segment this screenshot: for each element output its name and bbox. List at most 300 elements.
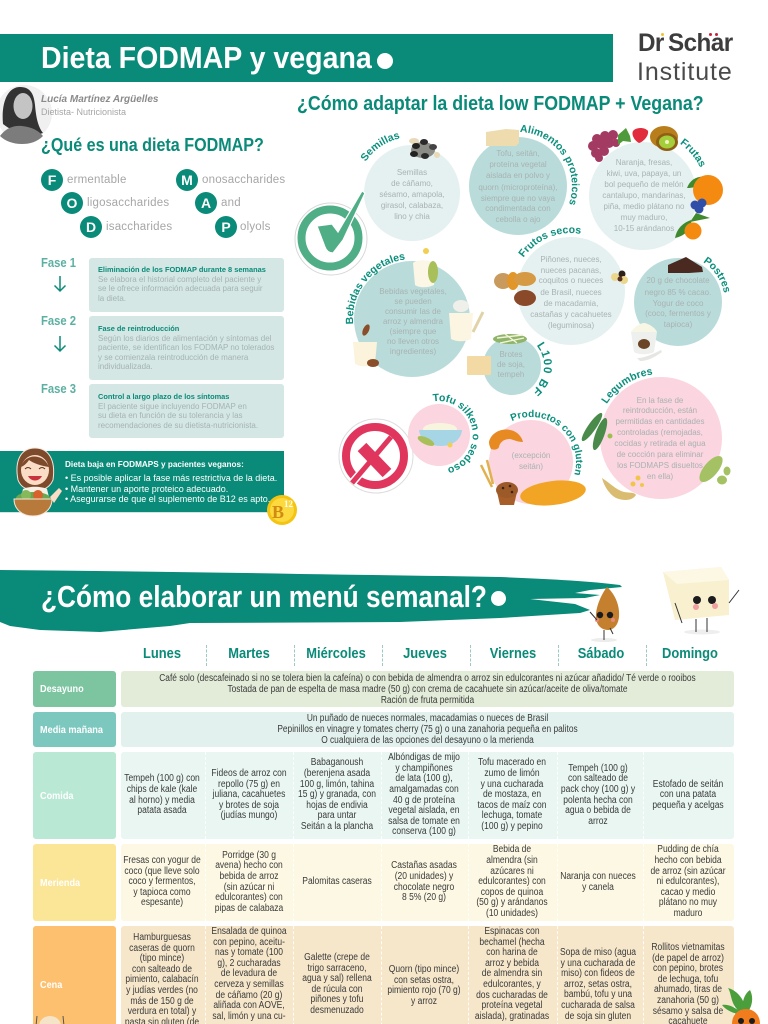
row: comida: arroz bbox=[588, 816, 608, 827]
row: merienda: espesante) bbox=[141, 897, 183, 908]
row: cena: y arroz bbox=[411, 996, 437, 1007]
row: cena: g), 2 cucharadas bbox=[217, 958, 281, 969]
row: merienda: edulcorantes) con bbox=[478, 876, 546, 887]
panel: frutas: Frutas bbox=[680, 138, 704, 167]
FODMAP acronym list: M bbox=[181, 172, 193, 188]
heading: how to adapt: ¿Cómo adaptar la dieta low FODMAP + Vegana? bbox=[297, 93, 704, 115]
panel: frutos secos: coquitos o nueces bbox=[539, 276, 603, 285]
icon: red cross badge bbox=[339, 419, 413, 493]
icon: B12 coin: 12 bbox=[284, 499, 294, 509]
panel: bebidas vegetales bbox=[346, 248, 484, 377]
row: cena: desmenuzado bbox=[310, 1005, 364, 1016]
callout text bbox=[65, 460, 277, 504]
panel: frutas: cantalupo, mandarinas, bbox=[602, 191, 686, 200]
phase 2 label: Fase 2 bbox=[41, 314, 76, 328]
panel: bebidas vegetales: se pueden bbox=[394, 297, 432, 306]
row: comida: tacos de maíz con bbox=[478, 800, 546, 811]
diagram: adapted foods bbox=[294, 125, 730, 506]
panel: legumbres: en ella) bbox=[647, 472, 673, 481]
row: comida: con salteado de bbox=[568, 773, 628, 784]
callout: vegan patients bbox=[0, 451, 284, 513]
panel: alimentos proteicos: aislada en polvo y bbox=[486, 171, 550, 180]
phase 1 box: se le ofrece información adecuada para seguir bbox=[98, 284, 263, 293]
row: cena: zanahoria (50 g) bbox=[657, 995, 719, 1006]
FODMAP acronym list: ligosaccharides bbox=[87, 197, 169, 209]
row: media mañana: O cualquiera de las opciones del desayuno o la merienda bbox=[321, 735, 534, 746]
row: merienda: coco y fermentos, bbox=[128, 876, 196, 887]
author name bbox=[41, 94, 158, 117]
row: cena: miso) con fideos de bbox=[561, 968, 635, 979]
table header: days of the week: Sábado bbox=[578, 645, 624, 662]
row: cena: bambú, tofu y una bbox=[564, 989, 632, 1000]
row: desayuno: Tostada de pan de espelta de masa madre (50 g) con crema de cacahuete sin azúcar/aceite de oliva/tomate bbox=[227, 684, 628, 695]
icon: soy drink bbox=[413, 248, 438, 287]
panel: frutos secos: de macadamia, bbox=[544, 299, 598, 308]
icon: coconut yogurt bbox=[631, 323, 662, 361]
callout text: • Mantener un aporte proteico adecuado. bbox=[65, 484, 228, 494]
row: comida: 40 g de proteína bbox=[393, 794, 455, 806]
table header: days of the week bbox=[143, 645, 718, 666]
row: comida bbox=[121, 752, 734, 839]
row: comida: vegetal aislada, en bbox=[389, 805, 459, 816]
row: merienda: (50 g) y arándanos bbox=[476, 897, 548, 908]
row: cena: con harina de bbox=[486, 947, 538, 958]
icon: tofu block bbox=[486, 129, 519, 146]
FODMAP acronym list: O bbox=[67, 195, 77, 211]
panel: legumbres: Legumbres bbox=[601, 369, 652, 404]
label: cena: Cena bbox=[40, 979, 62, 991]
row: comida: patata asada bbox=[137, 805, 187, 816]
panel: brotes y tempeh: de soja, bbox=[497, 360, 525, 369]
row: cena: arroz y bebida bbox=[485, 958, 539, 969]
row: merienda: (20 unidades) y bbox=[395, 871, 453, 882]
row: cena: trigo sarraceno, bbox=[307, 963, 367, 974]
row: comida: Tempeh (100 g) con bbox=[124, 773, 200, 784]
row: cena: de almendra sin bbox=[482, 968, 542, 979]
label: comida: Comida bbox=[40, 790, 74, 802]
row: comida: para untar bbox=[318, 810, 356, 821]
icon: mandarin bbox=[675, 213, 710, 240]
icon: soybeans bbox=[602, 476, 644, 500]
label: desayuno: Desayuno bbox=[40, 683, 84, 695]
arrow: phase 2 to 3 bbox=[54, 336, 66, 352]
panel: postres: Yogur de coco bbox=[653, 299, 704, 308]
row: merienda: plátano no muy bbox=[659, 897, 717, 908]
phase 3 box: su dieta en función de su tolerancia y las bbox=[98, 411, 243, 420]
icon: kiwi bbox=[650, 126, 678, 151]
FODMAP acronym list: onosaccharides bbox=[202, 174, 285, 186]
row: merienda: edulcorantes) con bbox=[215, 892, 283, 903]
row: merienda bbox=[121, 844, 734, 921]
row: cena: ahumado, tiras de bbox=[654, 984, 722, 995]
row: cena: Galette (crepe de bbox=[304, 952, 370, 963]
phase 2 box: paciente, se identifican los FODMAP no tolerados bbox=[98, 343, 274, 352]
panel: postres: tapioca) bbox=[664, 320, 693, 329]
row: comida: chips de kale (kale bbox=[127, 784, 197, 795]
row: merienda: (sin azúcar ni bbox=[224, 882, 274, 892]
row: cena: (tipo mince) bbox=[140, 953, 184, 964]
row: cena: Rollitos vietnamitas bbox=[651, 942, 725, 953]
FODMAP acronym list: and bbox=[221, 197, 241, 209]
phase 1 box bbox=[89, 258, 284, 312]
panel: postres bbox=[631, 256, 730, 361]
row: desayuno: Ración de fruta permitida bbox=[381, 695, 474, 706]
row: merienda: (10 unidades) bbox=[486, 908, 538, 919]
panel: frutos secos: (leguminosa) bbox=[548, 321, 594, 330]
panel: bebidas vegetales: (siempre que bbox=[390, 327, 437, 336]
label: desayuno bbox=[33, 671, 116, 707]
panel: brotes y tempeh: tempeh bbox=[498, 370, 524, 379]
row: cena: nas y tomate (100 bbox=[215, 947, 283, 958]
panel: tofu silken bbox=[408, 394, 478, 473]
phase 2 box: individualizada. bbox=[98, 362, 153, 371]
panel: postres: 20 g de chocolate bbox=[646, 276, 710, 285]
row: comida: lechuga, tomate bbox=[482, 810, 542, 821]
panel: frutas: piña, medio plátano no bbox=[604, 202, 685, 211]
row: cena bbox=[121, 926, 734, 1024]
phase 3 box bbox=[89, 384, 284, 438]
icon: muffin bbox=[496, 482, 518, 505]
panel: productos con gluten: Productos con gluten bbox=[510, 410, 583, 475]
header band bbox=[0, 34, 613, 82]
row: comida: pack choy (100 g) y bbox=[561, 784, 635, 795]
row: merienda: Pudding de chía bbox=[657, 844, 719, 855]
table header: days of the week: Lunes bbox=[143, 645, 181, 662]
FODMAP acronym list: A bbox=[201, 195, 211, 211]
icon: edamame bbox=[695, 452, 730, 486]
panel: legumbres: En la fase de bbox=[637, 396, 684, 405]
row: merienda: cacao y medio bbox=[661, 887, 715, 898]
panel: frutos secos bbox=[494, 227, 628, 345]
panel: bebidas vegetales: Bebidas vegetales, bbox=[379, 287, 447, 296]
panel: alimentos proteicos: condimentada con bbox=[485, 204, 551, 213]
phase 1 box: Se elabora el historial completo del paciente y bbox=[98, 275, 261, 284]
row: cena: Sopa de miso (agua bbox=[560, 947, 636, 958]
panel: productos con gluten: (excepción bbox=[512, 451, 550, 460]
icon: almond mascot bbox=[590, 587, 620, 642]
author name: Lucía Martínez Argüelles bbox=[41, 94, 158, 105]
row: merienda: hecho con bebida bbox=[654, 855, 722, 866]
row: comida: (berenjena asada bbox=[304, 768, 370, 779]
row: merienda: avena) hecho con bbox=[215, 860, 283, 871]
panel: semillas: de cáñamo, bbox=[391, 179, 433, 188]
title dot bbox=[377, 53, 393, 69]
row: comida: de mostaza, en bbox=[483, 789, 541, 800]
row: media mañana: Un puñado de nueces normales, macadamias o nueces de Brasil bbox=[307, 713, 548, 724]
icon: woman with vegetable bowl bbox=[14, 448, 62, 516]
panel: postres: negro 85 % cacao. bbox=[645, 288, 711, 297]
row: merienda: y tapioca como bbox=[133, 887, 191, 898]
row: merienda: almendra (sin bbox=[486, 855, 538, 866]
row: merienda: ni edulcorantes), bbox=[657, 876, 719, 887]
table header: days of the week: Miércoles bbox=[306, 645, 366, 662]
logo: Dr Schär Institute bbox=[637, 29, 733, 86]
row: cena: y una cucharada de bbox=[561, 958, 635, 969]
panel: frutos secos: Frutos secos bbox=[518, 227, 581, 258]
panel: bebidas vegetales: Bebidas vegetales bbox=[346, 254, 405, 324]
panel: brotes y tempeh bbox=[467, 334, 552, 396]
row: comida: Tofu macerado en bbox=[478, 757, 546, 768]
phase 2 box: Según los diarios de alimentación y síntomas del bbox=[98, 334, 271, 343]
row: comida: y champiñones bbox=[395, 763, 453, 774]
phase 2 box bbox=[89, 316, 284, 380]
panel: postres: (coco, fermentos y bbox=[645, 309, 711, 318]
heading: what is FODMAP: ¿Qué es una dieta FODMAP? bbox=[41, 135, 264, 155]
row: cena: Espinacas con bbox=[484, 926, 540, 937]
panel: legumbres: permitidas en cantidades bbox=[616, 417, 704, 426]
panel: frutas: muy maduro, bbox=[621, 213, 667, 222]
row: desayuno bbox=[121, 671, 734, 707]
row: comida: agua o bebida de bbox=[565, 805, 631, 816]
row: cena: y judías verdes (no bbox=[126, 985, 198, 996]
phase 3 box: Control a largo plazo de los síntomas bbox=[98, 392, 229, 401]
row: comida: (judías mungo) bbox=[221, 810, 277, 821]
icon: almond drink bbox=[353, 323, 379, 367]
table header: days of the week: Domingo bbox=[662, 645, 718, 662]
icon: bean sprouts bbox=[493, 334, 527, 344]
icon: small nuts bbox=[611, 270, 628, 284]
row: comida: Fideos de arroz con bbox=[211, 768, 287, 779]
icon: rice drink bbox=[449, 300, 483, 341]
FODMAP acronym list: olyols bbox=[240, 221, 271, 233]
heading: weekly menu: ¿Cómo elaborar un menú semanal? bbox=[41, 579, 487, 614]
row: media mañana: Pepinillos en vinagre y tomates cherry (75 g) o una zanahoria pequeña en palitos bbox=[277, 724, 578, 735]
icon: seeds bbox=[409, 138, 440, 159]
icon: chocolate bbox=[668, 257, 703, 273]
panel: semillas: lino y chia bbox=[394, 212, 430, 221]
table header: days of the week: Viernes bbox=[490, 645, 536, 662]
panel: bebidas vegetales: no lleven otros bbox=[387, 337, 439, 346]
panel: frutas: Naranja, fresas, bbox=[616, 158, 672, 167]
row: cena: bechamel (hecha bbox=[479, 937, 545, 948]
FODMAP acronym list: isaccharides bbox=[106, 221, 172, 233]
panel: legumbres: reintroducción, están bbox=[623, 406, 697, 415]
row: comida: amalgamadas con bbox=[389, 784, 459, 795]
row: comida: pequeña y acelgas bbox=[652, 800, 724, 811]
logo: Dr Schär Institute: Institute bbox=[637, 58, 733, 86]
row: cena: aislada), gratinadas bbox=[475, 1011, 549, 1022]
panel: productos con gluten bbox=[480, 410, 586, 506]
panel: semillas: Semillas bbox=[397, 168, 427, 177]
panel: frutos secos: de Brasil, nueces bbox=[540, 288, 602, 297]
row: cena: piñones y tofu bbox=[311, 994, 363, 1005]
FODMAP acronym list bbox=[41, 169, 285, 238]
panel: brotes y tempeh: Brotes bbox=[499, 350, 523, 359]
row: merienda: y canela bbox=[582, 882, 614, 892]
row: cena: con setas ostra, bbox=[394, 975, 454, 986]
callout text: • Asegurarse de que el suplemento de B12 es apto. bbox=[65, 494, 270, 504]
panel: alimentos proteicos: Tofu, seitán, bbox=[496, 149, 540, 158]
label: merienda bbox=[33, 844, 116, 921]
row: cena: más de 150 g de bbox=[130, 996, 194, 1007]
row: cena: sal, limón y una cu- bbox=[212, 1011, 286, 1022]
label: comida bbox=[33, 752, 116, 839]
panel: bebidas vegetales: consumir las de bbox=[385, 307, 442, 316]
arrow: phase 1 to 2 bbox=[54, 276, 66, 292]
row: cena: de lechuga, tofu bbox=[658, 974, 718, 985]
FODMAP acronym list: D bbox=[86, 219, 96, 235]
panel: frutos secos: nueces pacanas, bbox=[541, 266, 601, 275]
row: comida: Seitán a la plancha bbox=[301, 821, 373, 832]
row: comida: de lata (100 g), bbox=[395, 773, 453, 784]
banner: brush stroke bbox=[0, 570, 622, 632]
row: cena: con pepino, brotes bbox=[653, 963, 723, 974]
phase 1 box: la dieta. bbox=[98, 294, 126, 303]
row: cena: (de papel de arroz) bbox=[652, 953, 724, 964]
phase 3 box: recomendaciones de su dietista-nutricionista. bbox=[98, 421, 258, 430]
row: cena: Hamburguesas bbox=[133, 932, 191, 943]
table header: days of the week: Jueves bbox=[403, 645, 447, 662]
row: cena: de levadura de bbox=[221, 968, 277, 979]
label: cena bbox=[33, 926, 116, 1024]
icon: strawberry bbox=[632, 128, 648, 143]
row: comida: y una cucharada bbox=[481, 779, 543, 790]
row: merienda: Castañas asadas bbox=[391, 860, 457, 871]
panel: tofu silken: Tofu silken o sedoso bbox=[432, 394, 478, 473]
row: cena: con salteado de bbox=[132, 964, 192, 975]
icon: blueberries bbox=[690, 198, 706, 214]
row: cena: Quorn (tipo mince) bbox=[389, 964, 459, 975]
row: comida: con una patata bbox=[660, 789, 716, 800]
FODMAP acronym list: P bbox=[221, 219, 231, 235]
panel: frutos secos: Piñones, nueces, bbox=[540, 255, 602, 264]
row: merienda: Porridge (30 g bbox=[222, 850, 276, 861]
panel: alimentos proteicos: quorn (microproteína), bbox=[478, 183, 558, 192]
author name: Dietista- Nutricionista bbox=[41, 107, 126, 117]
panel: legumbres: controladas (remojadas, bbox=[617, 428, 703, 437]
panel: brotes y tempeh: L100 BF bbox=[534, 342, 552, 396]
row: comida: Albóndigas de mijo bbox=[388, 752, 460, 763]
panel: legumbres bbox=[582, 369, 730, 500]
row: merienda: chocolate negro bbox=[394, 882, 454, 892]
panel: postres: Postres bbox=[704, 256, 730, 292]
phase 2 box: y se comienzala reintroducción de manera bbox=[98, 353, 248, 362]
row: merienda: 8 5% (20 g) bbox=[402, 892, 446, 903]
row: merienda: Fresas con yogur de bbox=[123, 855, 201, 866]
callout text: Dieta baja en FODMAPS y pacientes veganos: bbox=[65, 460, 244, 469]
panel: bebidas vegetales: arroz y almendra bbox=[383, 317, 444, 326]
row: cena: caseras de quorn bbox=[129, 943, 195, 954]
row: merienda: coco (que lleve solo bbox=[124, 866, 200, 877]
row: merienda: de arroz (sin azúcar bbox=[650, 866, 726, 877]
icon: nuts bbox=[494, 272, 536, 306]
panel: frutas bbox=[588, 126, 723, 250]
callout text: • Es posible aplicar la fase más restrictiva de la dieta. bbox=[65, 473, 277, 483]
phase 3 label: Fase 3 bbox=[41, 382, 76, 396]
row: comida: salsa de tomate en bbox=[388, 816, 460, 827]
icon: wheat bbox=[481, 460, 493, 487]
row: merienda: azúcares ni bbox=[490, 866, 534, 877]
row: cena: aliñada con AOVE, bbox=[213, 1000, 285, 1011]
panel: alimentos proteicos bbox=[469, 125, 580, 235]
phase 1 box: Eliminación de los FODMAP durante 8 semanas bbox=[98, 265, 266, 274]
panel: frutos secos: castañas y cacahuetes bbox=[530, 310, 612, 319]
row: merienda: pipas de calabaza bbox=[215, 903, 283, 914]
phase 3 box: El paciente sigue incluyendo FODMAP en bbox=[98, 402, 247, 411]
row: comida: zumo de limón bbox=[484, 768, 540, 779]
FODMAP acronym list: ermentable bbox=[67, 174, 127, 186]
row: cena: cucharada de salsa bbox=[561, 1000, 635, 1011]
row: cena: pimiento rojo (70 g) bbox=[387, 985, 461, 996]
row: comida: Tempeh (100 g) bbox=[568, 763, 628, 774]
row: merienda: Palomitas caseras bbox=[302, 876, 372, 887]
row: comida: polenta hecha con bbox=[563, 794, 633, 806]
row: cena: cerveza y semillas bbox=[214, 979, 284, 990]
panel: semillas: sésamo, amapola, bbox=[379, 190, 445, 199]
panel: alimentos proteicos: cebolla o ajo bbox=[496, 215, 541, 224]
FODMAP acronym list: F bbox=[48, 172, 56, 188]
row: desayuno: Café solo (descafeinado si no se tolera bien la cafeína) o con bebida de almendra o arroz sin edulcorantes ni azúcar añadido/ Té verde o rooibos bbox=[159, 673, 696, 684]
row: comida: conserva (100 g) bbox=[392, 826, 456, 837]
row: comida: (100 g) y pepino bbox=[481, 821, 543, 832]
panel: frutas: 10-15 arándanos bbox=[614, 224, 674, 233]
row: cena: arroz, setas ostra, bbox=[564, 979, 632, 990]
icon: pea pods bbox=[579, 411, 612, 452]
panel: bebidas vegetales: ingredientes) bbox=[390, 347, 436, 356]
panel: semillas bbox=[360, 133, 460, 241]
row: cena: pimiento, calabacín bbox=[125, 974, 199, 985]
row: cena: sésamo y salsa de bbox=[653, 1006, 723, 1017]
icon: carrot mascot bbox=[722, 988, 760, 1024]
panel: productos con gluten: seitán) bbox=[519, 462, 543, 471]
icon: grapes bbox=[588, 128, 631, 162]
row: comida: al horno) y media bbox=[129, 794, 195, 806]
icon: bread bbox=[519, 477, 587, 509]
row: comida: 100 g, limón, tahina bbox=[300, 779, 374, 790]
panel: legumbres: cocidas y retirada el agua bbox=[614, 439, 706, 448]
panel: alimentos proteicos: siempre que no vaya bbox=[481, 194, 556, 203]
panel: semillas: Semillas bbox=[360, 133, 400, 161]
panel: legumbres: de cocción para eliminar bbox=[617, 450, 704, 459]
label: media mañana bbox=[33, 712, 116, 747]
row: cena: de rúcula con bbox=[311, 984, 363, 995]
row: comida: repollo (75 g) en bbox=[218, 779, 280, 790]
panel: frutas: bol pequeño de melón bbox=[604, 180, 684, 189]
row: cena: dos cucharadas de bbox=[476, 990, 548, 1001]
row: cena: Ensalada de quinoa bbox=[211, 926, 287, 937]
icon: croissant bbox=[489, 430, 523, 450]
phase 1 label: Fase 1 bbox=[41, 256, 76, 270]
icon: orange bbox=[687, 175, 723, 205]
banner dot bbox=[491, 591, 506, 606]
panel: alimentos proteicos: proteína vegetal bbox=[489, 160, 547, 169]
row: merienda: copos de quinoa bbox=[481, 887, 543, 898]
title: Dieta FODMAP y vegana bbox=[41, 40, 372, 75]
row: cena: agua y sal) rellena bbox=[302, 973, 372, 984]
row: comida: y brotes de soja bbox=[219, 800, 279, 811]
icon: green check badge bbox=[295, 191, 367, 275]
phase 2 box: Fase de reintroducción bbox=[98, 324, 179, 333]
row: cena: proteína vegetal bbox=[482, 1000, 542, 1011]
icon: small mascot bottom-left bbox=[36, 1016, 64, 1024]
label: merienda: Merienda bbox=[40, 876, 80, 888]
row: cena: de cáñamo (20 g) bbox=[216, 990, 282, 1001]
panel: legumbres: los FODMAPS disueltos bbox=[617, 461, 703, 470]
panel: semillas: girasol, calabaza, bbox=[381, 201, 443, 210]
icon: bowl of tofu bbox=[416, 423, 462, 448]
row: media mañana bbox=[121, 712, 734, 747]
panel: alimentos proteicos: Alimentos proteicos bbox=[520, 125, 580, 205]
row: comida: Babaganoush bbox=[311, 757, 363, 768]
row: comida: Estofado de seitán bbox=[653, 779, 723, 790]
icon: B12 coin bbox=[267, 495, 297, 525]
logo: Dr Schär Institute: Dr Schar bbox=[638, 29, 733, 57]
panel: frutas: kiwi, uva, papaya, un bbox=[607, 169, 681, 178]
label: media mañana: Media mañana bbox=[40, 724, 103, 736]
row: comida: hojas de endivia bbox=[306, 800, 368, 811]
row: cena: con pepino, aceitu- bbox=[213, 937, 285, 948]
row: merienda: bebida de arroz bbox=[219, 871, 279, 882]
